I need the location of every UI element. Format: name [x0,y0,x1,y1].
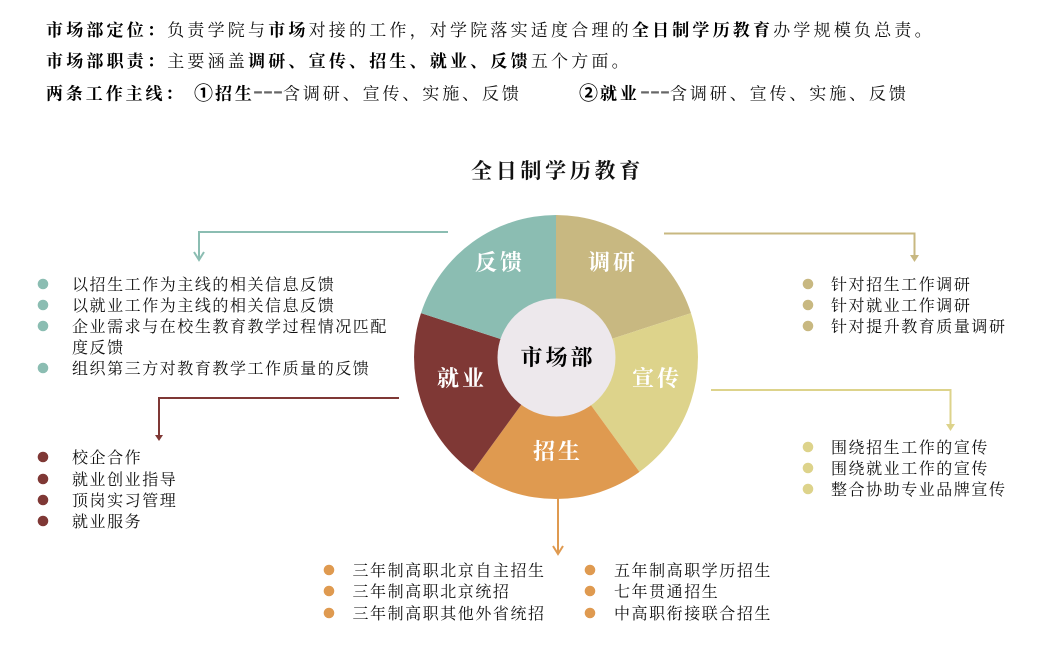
list: publicity [803,438,1007,499]
list: employment: 就业创业指导 [72,471,177,489]
list: publicity: 整合协助专业品牌宣传 [831,480,1007,499]
line: two work lines: --- [253,74,283,106]
donut chart [414,215,698,499]
title: 全日制学历教育 [471,159,644,183]
label: research: 调研 [588,250,638,275]
list: feedback: 组织第三方对教育教学工作质量的反馈 [72,360,370,378]
line: two work lines: 招生 [215,84,255,104]
line: two work lines: 两条工作主线： [46,84,185,104]
text block: market department intro [46,20,935,106]
arrow: feedback [194,232,448,260]
list: research: 针对招生工作调研 [831,275,971,294]
list: research [803,275,1007,336]
list: employment [38,449,177,531]
list: employment: 顶岗实习管理 [72,492,177,510]
list: enrollment left: 三年制高职北京统招 [352,582,510,601]
segment: publicity [556,313,698,472]
centre circle [498,298,616,416]
line: two work lines: 含调研、宣传、实施、反馈 [670,84,909,104]
segment: feedback [421,215,556,357]
list: employment: 校企合作 [72,449,142,467]
list: feedback: 以招生工作为主线的相关信息反馈 [72,275,335,294]
list: enrollment right: 中高职衔接联合招生 [614,604,772,623]
list: publicity: 围绕招生工作的宣传 [831,438,989,457]
line: two work lines: ① [194,78,213,106]
line: two work lines: 就业 [600,84,640,104]
label: publicity: 宣传 [632,366,682,391]
list: enrollment right [585,561,772,623]
list: publicity: 围绕就业工作的宣传 [831,459,989,478]
line: two work lines: ② [579,78,598,106]
list: feedback: 以就业工作为主线的相关信息反馈 [72,297,335,315]
segment: employment [414,313,556,472]
list: enrollment left: 三年制高职其他外省统招 [352,604,546,623]
label: market department: 市场部 [520,345,596,370]
label: employment: 就业 [437,366,487,391]
segment: research [556,215,691,357]
list: research: 针对提升教育质量调研 [831,317,1007,336]
list: employment: 就业服务 [72,513,142,531]
list: enrollment right: 五年制高职学历招生 [614,561,772,580]
arrow: employment [155,398,399,441]
line: positioning: 市场部定位：负责学院与市场对接的工作，对学院落实适度合理的全日制学历教育办学规模负总责。 [46,20,935,40]
segment: enrollment [472,357,640,499]
label: enrollment: 招生 [533,439,583,464]
line: two work lines: --- [640,74,670,106]
list: enrollment left [324,561,546,623]
list: enrollment right: 七年贯通招生 [614,582,719,601]
list: enrollment left: 三年制高职北京自主招生 [352,561,546,580]
arrow: enrollment [553,498,563,554]
arrow: publicity [711,390,955,431]
arrow: research [664,234,919,262]
line: two work lines: 含调研、宣传、实施、反馈 [283,84,522,104]
line: duties: 市场部职责：主要涵盖调研、宣传、招生、就业、反馈五个方面。 [46,51,632,71]
list: research: 针对就业工作调研 [831,297,971,315]
list: feedback: 度反馈 [72,339,125,357]
list: feedback: 企业需求与在校生教育教学过程情况匹配 [72,318,388,336]
label: feedback: 反馈 [475,250,525,275]
list: feedback [38,275,388,378]
